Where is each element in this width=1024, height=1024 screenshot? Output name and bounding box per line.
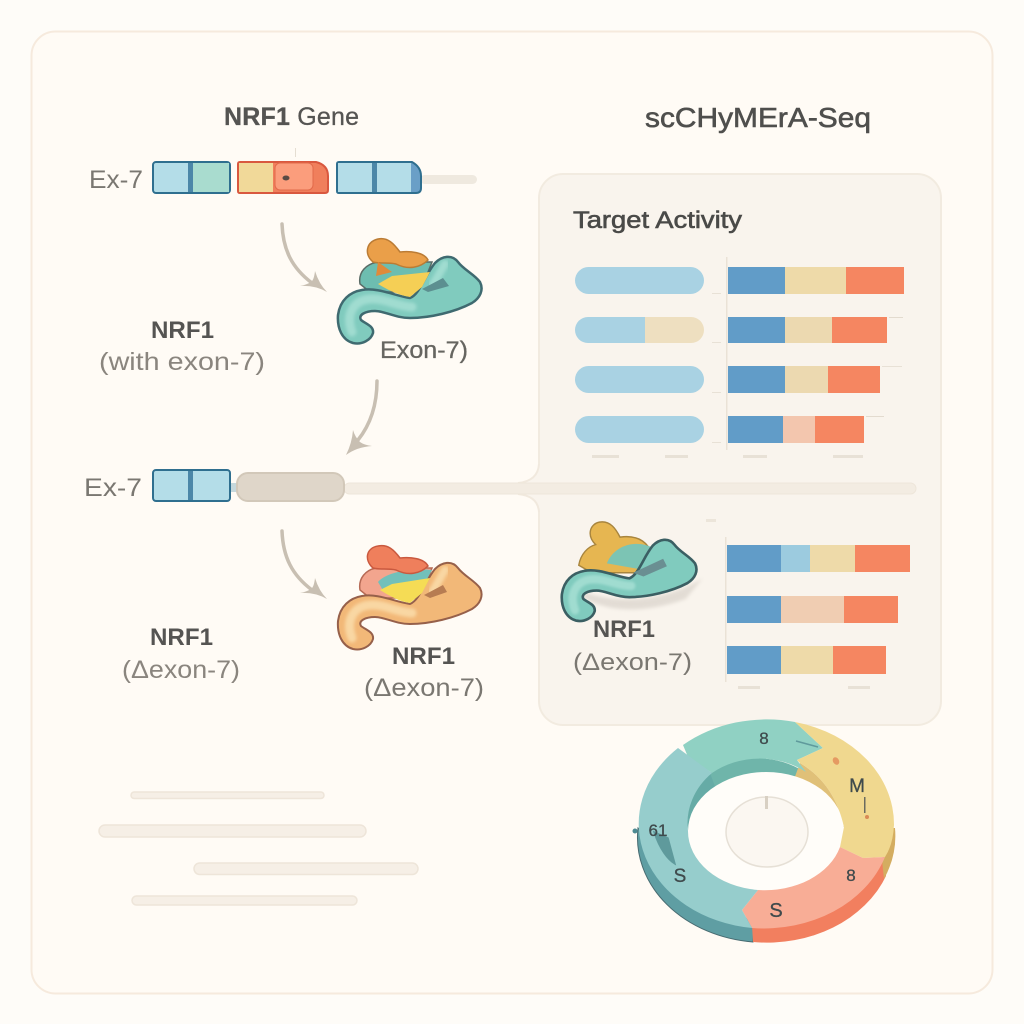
ring segment: left teal [639,748,758,928]
ring letters: 8 [759,729,769,748]
label: Ex-7: Ex-7 [89,166,143,194]
ring letters [649,729,865,922]
heading: NRF1 Gene: NRF1 Gene [224,103,359,131]
chart: left pills [575,267,721,458]
ring letters: S [769,900,783,922]
label: panel NRF1: NRF1 [593,616,655,643]
ring segment: top teal [683,719,823,773]
ring letters: M [849,776,865,797]
placeholder text lines [99,792,418,905]
gene track: with exon-7 [89,148,477,194]
ring letters: S [674,866,686,887]
heading: target activity: Target Activity [573,207,742,234]
label: Ex-7 lower: Ex-7 [84,474,142,502]
ring centre hole [688,772,844,890]
label: NRF1 with exon-7: (with exon-7) [99,348,265,376]
arrow: gene to delta protein [282,531,327,599]
protein: orange delta exon-7 [338,546,482,649]
heading: scCHyMErA-Seq: scCHyMErA-Seq [645,102,871,133]
label: NRF1 delta exon-7 [122,624,240,684]
chart: lower stacked bars [706,519,910,689]
ring marks [632,756,869,834]
label: Exon-7): Exon-7) [380,337,468,364]
ring letters: 61 [649,821,667,840]
ring segment: yellow [795,722,894,858]
ring letters: 8 [846,866,856,885]
ring centre disc [726,796,808,867]
label: NRF1 delta protein [364,643,484,702]
label: NRF1 delta exon-7: (Δexon-7) [122,656,240,684]
arrow: gene to protein [282,224,327,292]
ring cracks [654,741,818,864]
protein: teal in panel [562,522,703,621]
protein: teal with exon-7 [338,239,482,343]
ring side walls [637,828,895,943]
label: panel delta exon-7: (Δexon-7) [573,649,692,676]
arrow: protein to spliced gene [346,381,377,455]
gene track: delta exon-7 [84,470,916,502]
label: NRF1 with exon-7 [99,317,265,376]
label: NRF1 delta protein: (Δexon-7) [364,674,484,702]
ring diagram [632,719,895,943]
chart: upper stacked bars [726,257,904,458]
label: NRF1 delta protein: NRF1 [392,643,455,670]
panel: target activity [490,174,941,725]
label: NRF1 delta exon-7: NRF1 [150,624,213,651]
label: NRF1 with exon-7: NRF1 [151,317,214,344]
ring segment: salmon [742,847,885,928]
ring inner walls [687,752,844,840]
